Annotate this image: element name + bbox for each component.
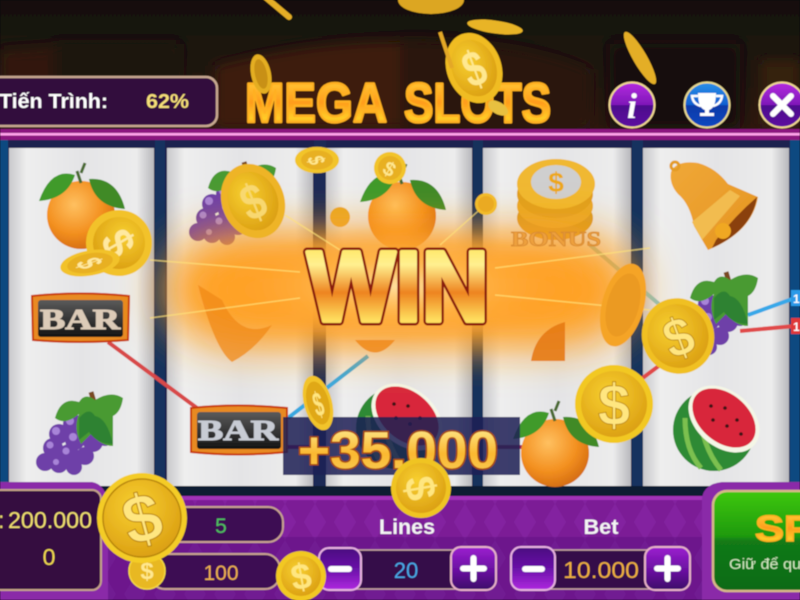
coin: large bottom left [97,473,187,563]
coin faded behind glow [330,207,350,227]
bonus label: BONUS [511,227,601,251]
coin: reel 2 [210,154,296,248]
spin button: Giữ để qu [729,556,800,573]
bet stepper: 10.000 [563,557,639,583]
coin: reel 1 flat [58,245,122,281]
symbol: watermelon reel 5 [673,372,773,471]
coin: reel 2: $ [232,172,274,232]
symbol: BAR reel 2: BAR [198,415,279,447]
light rays [150,205,650,318]
coin: right upper [631,288,725,384]
reels [9,148,789,486]
balance panel [0,482,108,600]
coin: right upper: $ [655,305,702,371]
symbol: bonus coins reel 4: $ [548,167,564,198]
coin: small over logo [485,97,511,119]
logo: Mega Slots: SLOTS [404,71,551,134]
symbol: orange reel 1 [39,163,125,249]
symbol: grapes reel 5 [671,272,758,355]
top neon divider [0,129,800,140]
coin: top reel 2 flat: $ [301,154,330,167]
coin: top center big [436,25,512,111]
logo: Mega Slots: MEGA [245,71,387,134]
button: info [610,82,654,128]
symbols seen through glow [198,285,565,362]
coin: large bottom left: $ [114,477,170,561]
coin: top reel 3 [368,146,412,190]
coin: clipped top [398,0,464,14]
background: casino hall [0,0,800,135]
coin amount pill [150,554,280,589]
progress panel: Tiến Trình: [0,91,108,113]
symbol: orange reel 4 [513,401,599,487]
symbol: grapes reel 1 [36,392,123,475]
coin amount pill: 100 [203,562,239,585]
payout lines [108,245,795,447]
reel frame background [0,135,800,500]
coin: right lower [575,365,653,443]
coin: over logo [247,52,275,96]
win glow [165,226,635,346]
coin: tiny reel gap [475,193,497,215]
coin: over banner [391,458,451,518]
coin: top reel 2 flat [295,147,339,173]
coin: reel 1 flat: $ [67,254,112,273]
coin: bottom center edge [276,551,326,600]
coin: top center big: $ [455,40,494,99]
coin: over banner: $ [395,473,446,504]
progress panel [0,77,217,126]
coin: faded in glow [592,259,654,351]
symbol: BAR reel 1 [32,294,129,342]
lines stepper: 20 [394,558,418,583]
WIN heading: WIN [307,231,489,343]
coin: bottom center edge: $ [288,555,315,598]
logo: Mega Slots [245,71,551,134]
coin: top reel 3: $ [379,157,399,182]
coin: thin beside top coin [440,32,452,68]
balance panel: 200.000 [8,507,92,533]
lines won pill [150,507,283,542]
label: lines: Lines [379,516,435,539]
button: trophy [684,82,730,128]
symbol: BAR reel 1: BAR [40,304,121,336]
lines won pill: 5 [215,515,227,538]
symbol: grapes reel 2 [189,162,276,245]
lines stepper [319,547,496,590]
label: bet: Bet [584,516,619,539]
button: close [760,82,800,128]
coin: right lower: $ [598,373,630,438]
bottom control bar [0,496,800,600]
coin: mid reel gap [297,372,339,434]
coin: thin top left [264,0,289,17]
symbol: BAR reel 2 [191,406,287,454]
line tags [791,290,800,334]
coin: reel 1 tilted: $ [90,221,145,267]
coin: thin right [619,29,661,87]
line tags: 1 [793,292,800,306]
symbol: bonus coins reel 4 [517,159,595,240]
symbol: bell reel 5 [671,162,758,250]
spin button [702,482,800,600]
symbol: watermelon reel 3 [356,370,456,469]
balance panel: 0 [43,544,55,570]
coin: small pill icon: $ [140,558,154,585]
reel gaps shading [0,140,800,500]
winnings banner: +35.000 [298,422,498,480]
coin: thin edge top center [466,17,524,37]
progress panel: 62% [146,91,189,113]
line tags: 1 [793,320,800,334]
coin: reel 1 tilted [74,198,164,288]
coin: small pill icon [129,553,165,589]
bet stepper [511,547,690,590]
symbol: orange reel 3 [360,164,446,250]
WIN heading: WIN [307,231,489,343]
button: info: i [627,86,637,126]
coin: mid reel gap: $ [309,385,328,424]
